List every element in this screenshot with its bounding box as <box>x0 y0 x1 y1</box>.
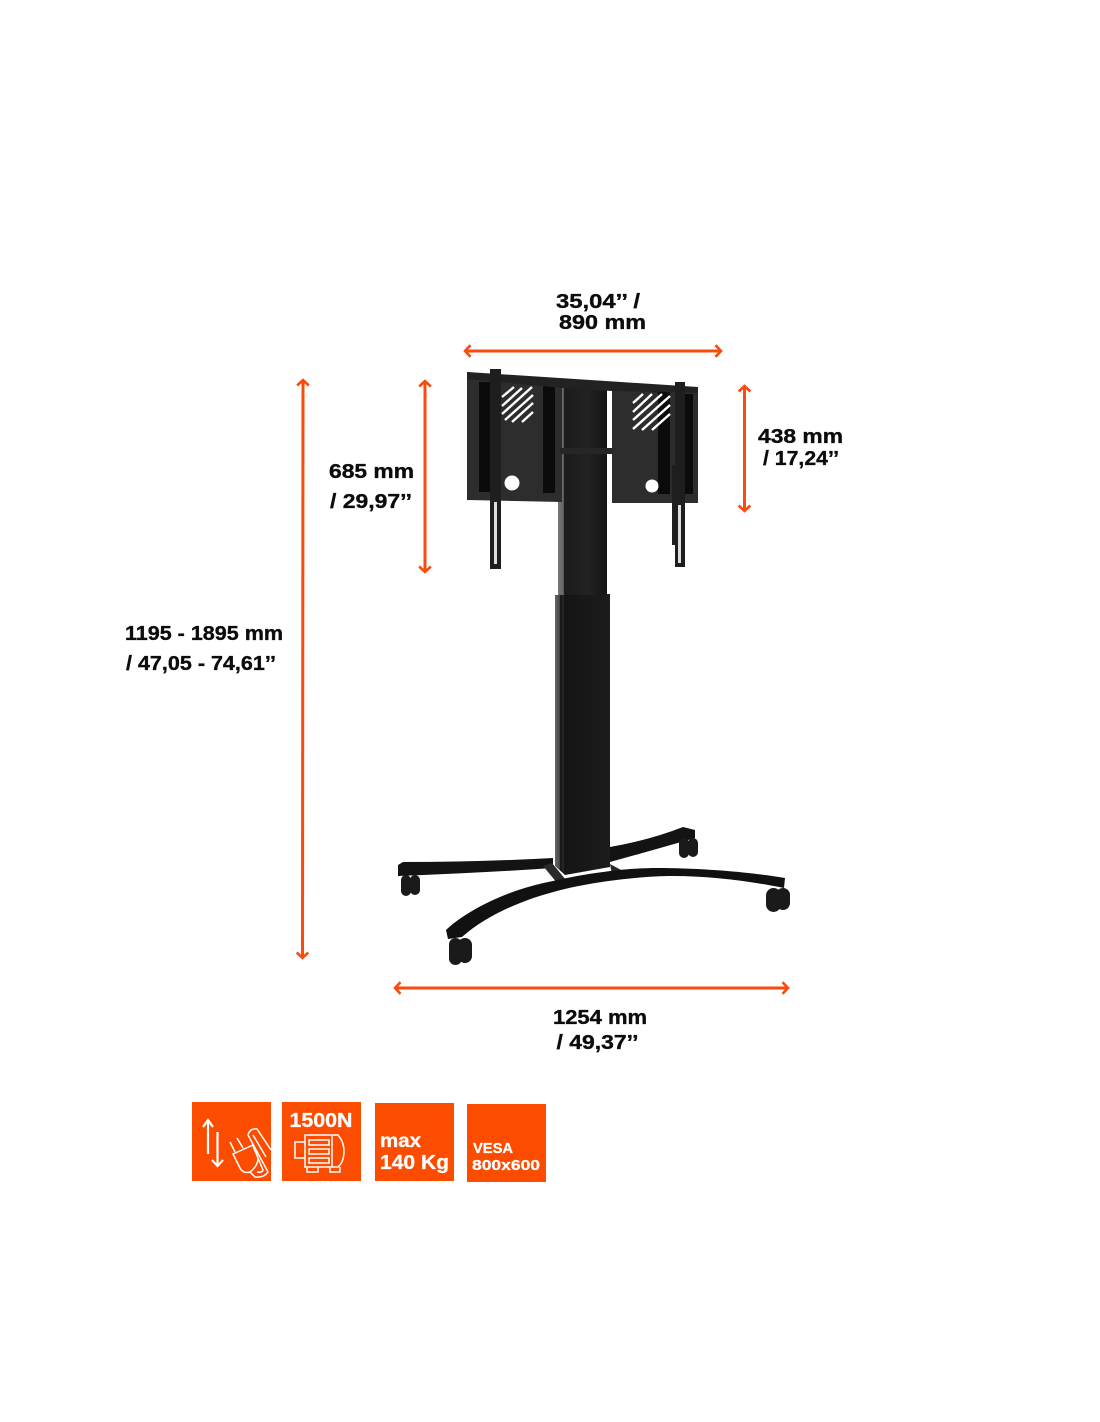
base: center brace <box>543 863 623 884</box>
dimension: base width <box>395 988 788 1054</box>
caster: front right <box>766 888 790 912</box>
badge: 1500N motor: 1500N <box>290 1110 352 1132</box>
icon: motor <box>295 1135 344 1172</box>
badge: max load: 140 Kg <box>380 1152 449 1174</box>
bracket: left <box>490 369 501 569</box>
dimension: panel height <box>744 386 843 511</box>
badge: max load <box>375 1103 454 1181</box>
bracket: right <box>672 382 685 567</box>
badge: VESA size: 800x600 <box>472 1157 540 1174</box>
badge: electric height adjustment <box>192 1102 271 1181</box>
dimension: total height: / 47,05 - 74,61’’ <box>126 653 276 675</box>
dimension: base width: 1254 mm <box>553 1007 647 1029</box>
badge: max load: max <box>380 1131 421 1152</box>
column: lower section <box>555 594 610 875</box>
column: upper section <box>558 384 607 595</box>
dimension: bracket height: 685 mm <box>329 461 414 483</box>
dimension: bracket height <box>329 381 425 572</box>
mount: top rail <box>467 372 698 393</box>
caster: rear left <box>401 875 420 896</box>
badge: VESA size <box>467 1104 546 1182</box>
mount: right panel <box>612 387 698 503</box>
base: rear feet <box>398 827 695 876</box>
product: height-adjustable display stand <box>398 369 790 965</box>
dimension: base width: / 49,37’’ <box>556 1032 638 1054</box>
dimension: display width: 35,04’’ / <box>556 291 641 313</box>
badge: VESA size: VESA <box>473 1140 513 1157</box>
mount: left panel <box>467 372 562 502</box>
caster: rear right <box>679 838 698 858</box>
base: front arc foot <box>446 868 785 939</box>
dimension: bracket height: / 29,97’’ <box>330 491 412 513</box>
dimension: display width: 890 mm <box>559 312 646 334</box>
dimension: panel height: 438 mm <box>758 426 843 448</box>
icon: electric plug <box>230 1129 271 1177</box>
dimension: total height <box>125 380 303 958</box>
caster: front left <box>449 938 472 965</box>
dimension: display width <box>465 291 721 351</box>
dimension: panel height: / 17,24’’ <box>763 448 839 470</box>
dimension: total height: 1195 - 1895 mm <box>125 623 283 645</box>
badge: 1500N motor <box>282 1102 361 1181</box>
icon: up and down arrows <box>203 1120 223 1166</box>
mount: cross bar <box>560 448 613 454</box>
